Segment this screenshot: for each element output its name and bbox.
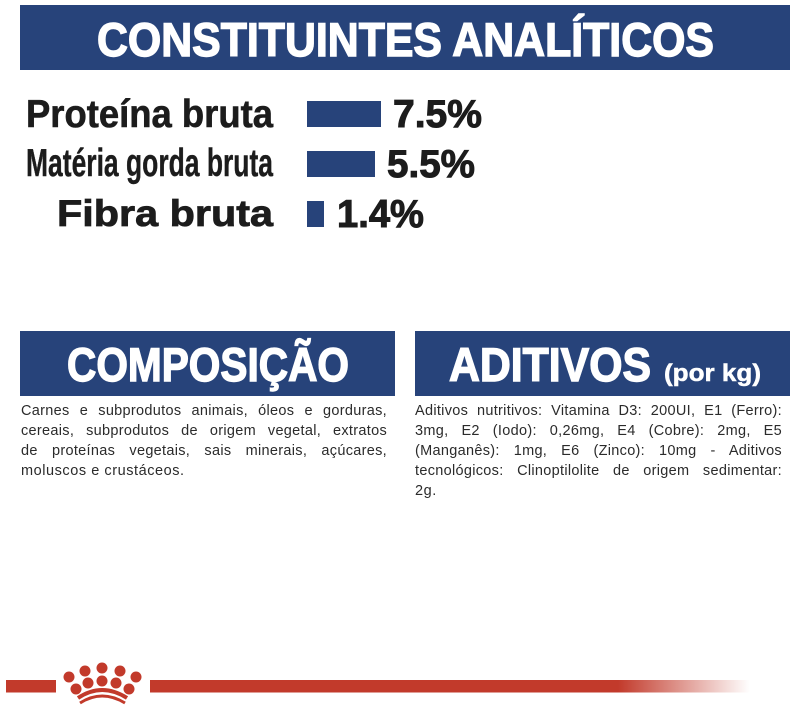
row: Matéria gorda bruta: 5.5% [387,143,475,186]
text: composição body: cereais, subprodutos de origem vegetal, extratos [21,423,387,439]
panel header: Aditivos: ADITIVOS [449,338,651,391]
row: Proteína bruta [26,93,482,136]
row: Fibra bruta: 1.4% [337,193,424,236]
footer red line [6,680,750,692]
icon: Royal Canin crown [64,662,142,703]
text: composição body: Carnes e subprodutos animais, óleos e gorduras, [21,403,387,419]
panel header: Aditivos [415,331,790,396]
text: aditivos body: tecnológicos: Clinoptilolite de origem sedimentar: [415,463,782,479]
text: composição body: moluscos e crustáceos. [21,463,185,479]
text: composição body [21,403,387,479]
header banner: CONSTITUINTES ANALÍTICOS [97,13,714,66]
text: aditivos body: 3mg, E2 (Iodo): 0,26mg, E4 (Cobre): 2mg, E5 [415,423,782,439]
row: Matéria gorda bruta: Matéria gorda bruta [26,142,273,185]
row: Fibra bruta: Fibra bruta [57,193,273,234]
panel header: Composição: COMPOSIÇÃO [67,338,349,391]
text: aditivos body: Aditivos nutritivos: Vitamina D3: 200UI, E1 (Ferro): [415,403,782,419]
row: Fibra bruta [57,193,424,236]
row: Proteína bruta: 7.5% [393,93,482,136]
text: aditivos body: (Manganês): 1mg, E6 (Zinco): 10mg - Aditivos [415,443,782,459]
panel header: Aditivos: (por kg) [664,360,761,387]
text: composição body: de proteínas vegetais, sais minerais, açúcares, [21,443,387,459]
row: Proteína bruta: Proteína bruta [26,93,273,136]
text: aditivos body: 2g. [415,483,437,499]
text: aditivos body [415,403,782,499]
